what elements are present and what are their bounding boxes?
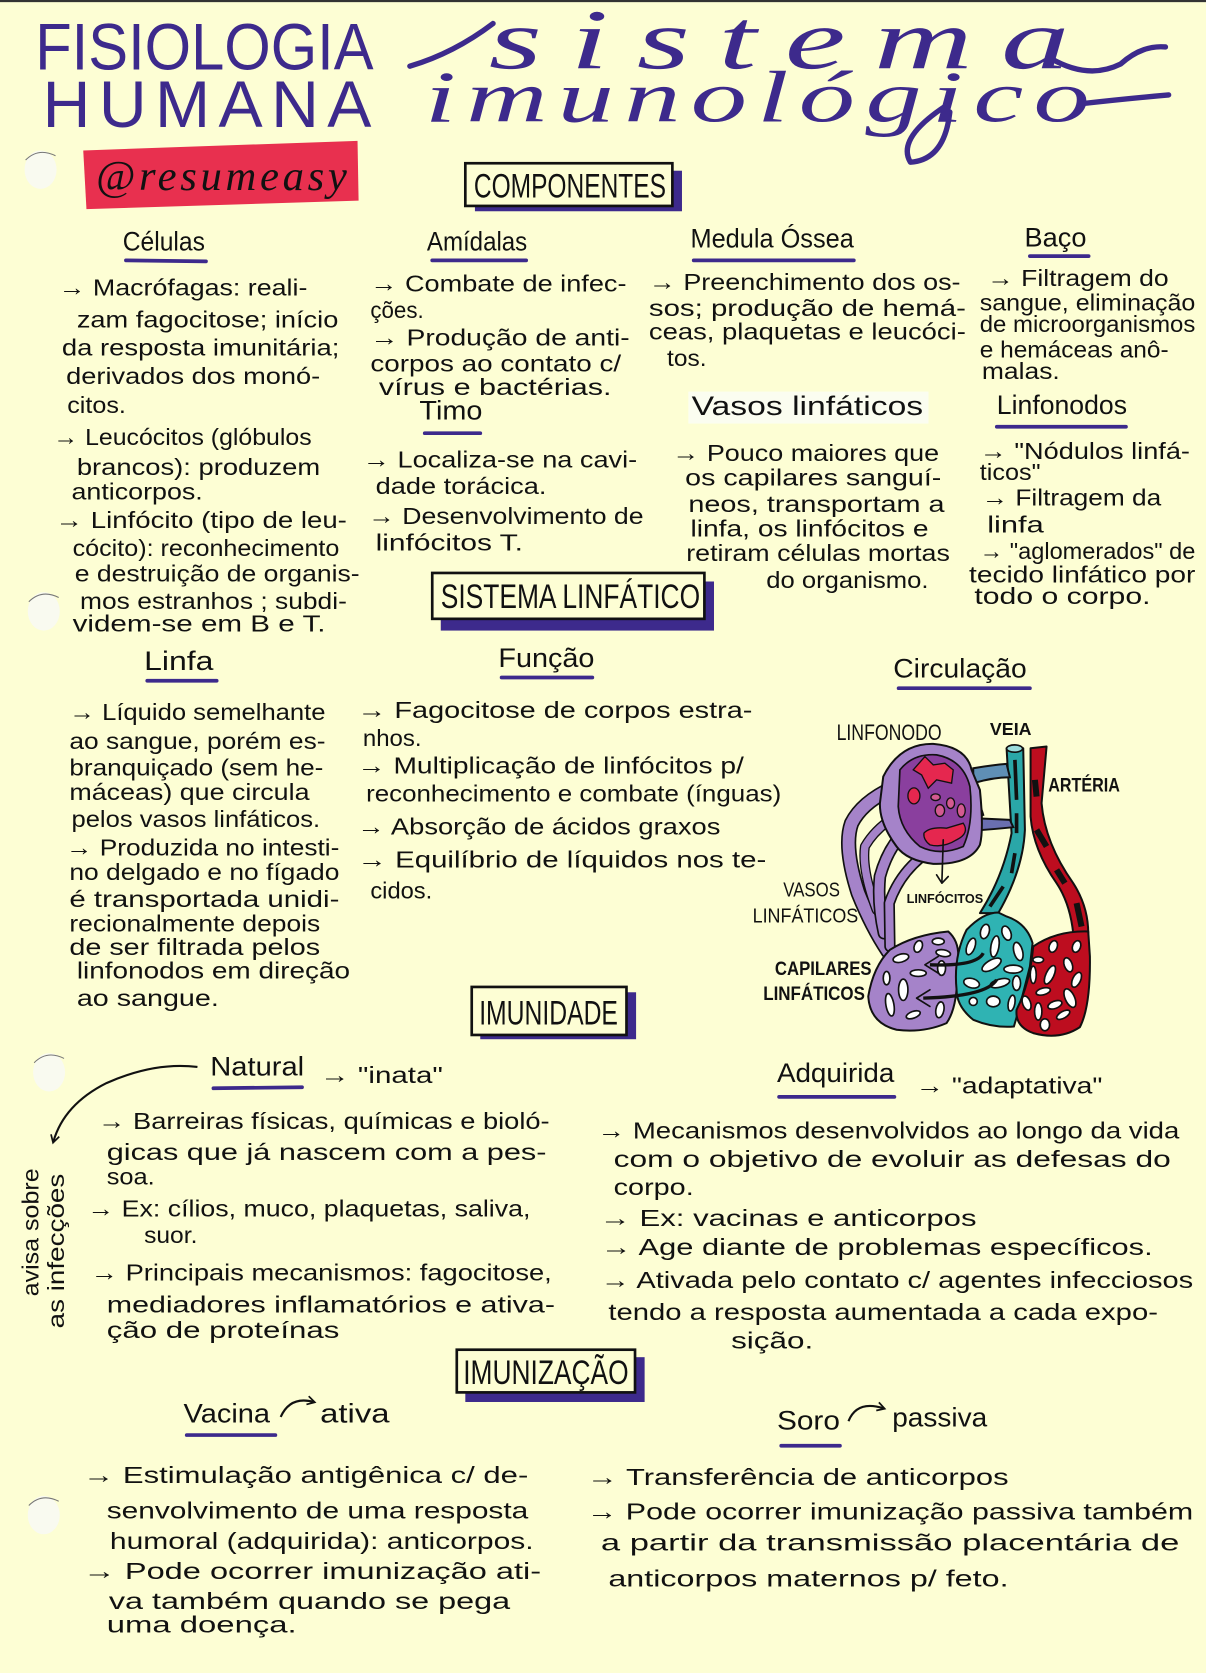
heading: Componentes xyxy=(465,163,682,211)
text: Linfa body: → Produzida no intesti- xyxy=(66,835,339,861)
text: Linfa body: ao sangue, porém es- xyxy=(69,728,326,754)
text: Vasos linfáticos body xyxy=(672,440,950,593)
title: sistema imunológico: imunológico xyxy=(425,58,1090,138)
title: sistema imunológico xyxy=(410,0,1169,162)
text: Natural body: → Principais mecanismos: fagocitose, xyxy=(91,1259,552,1285)
side note: avisa sobre as infecções xyxy=(17,1168,69,1328)
text: Vasos linfáticos body: linfa, os linfócitos e xyxy=(691,516,929,542)
text: Adquirida body: → Age diante de problemas específicos. xyxy=(601,1234,1153,1260)
heading: Imunidade xyxy=(472,987,636,1039)
text: Medula Óssea body xyxy=(649,269,966,371)
title: Fisiologia Humana: FISIOLOGIA xyxy=(35,10,374,84)
text: Adquirida body: sição. xyxy=(731,1328,813,1354)
heading: Soro: Soro xyxy=(777,1406,840,1436)
heading: Vasos linfáticos: Vasos linfáticos xyxy=(692,391,923,421)
heading: Soro xyxy=(777,1403,987,1446)
text: Linfa body: → Líquido semelhante xyxy=(69,699,326,725)
text: Linfonodos body: tecido linfático por xyxy=(969,562,1196,588)
heading: Amídalas: Amídalas xyxy=(427,227,527,257)
text: Células body: → Macrófagas: reali- xyxy=(59,275,307,301)
heading: Linfonodos: Linfonodos xyxy=(997,390,1127,420)
text: Baço body: malas. xyxy=(982,358,1060,384)
text: Natural body: gicas que já nascem com a pes- xyxy=(107,1139,546,1165)
text: Baço body: de microorganismos xyxy=(980,311,1195,337)
label: @resumeasy: @resumeasy xyxy=(96,153,347,200)
text: Função body: → Fagocitose de corpos estra- xyxy=(358,697,752,723)
heading: Função: Função xyxy=(498,643,594,673)
artery xyxy=(1031,747,1088,933)
text: Vacina body: va também quando se pega xyxy=(109,1588,511,1614)
text: Baço body xyxy=(980,265,1195,384)
text: Células body: cócito): reconhecimento xyxy=(73,535,339,561)
heading: Imunização xyxy=(457,1350,645,1402)
panel: Linfonodos xyxy=(969,390,1196,609)
heading: Componentes: COMPONENTES xyxy=(474,167,666,205)
panel: Circulação xyxy=(753,654,1120,1036)
text: Função body: cidos. xyxy=(370,877,432,903)
text: Adquirida body: → Ex: vacinas e anticorpos xyxy=(600,1205,977,1231)
heading: Vacina: ativa xyxy=(320,1398,390,1428)
text: Função body xyxy=(358,697,781,903)
text: Medula Óssea body: → Preenchimento dos os- xyxy=(649,269,961,295)
text: Baço body: → Filtragem do xyxy=(987,265,1169,291)
capillary beds xyxy=(868,912,1090,1036)
text: Linfa body: no delgado e no fígado xyxy=(69,859,339,885)
text: Amídalas body: → Combate de infec- xyxy=(370,270,626,296)
heading: Vacina xyxy=(184,1398,390,1435)
heading: Sistema Linfático xyxy=(432,573,714,631)
panel: Linfa xyxy=(66,646,350,1011)
text: Vacina body: humoral (adquirida): anticorpos. xyxy=(110,1528,534,1554)
text: Soro body: → Pode ocorrer imunização passiva também xyxy=(587,1498,1193,1524)
panel: Células xyxy=(53,227,360,637)
panel: Baço xyxy=(980,222,1195,384)
text: Natural body: → Ex: cílios, muco, plaquetas, saliva, xyxy=(88,1195,530,1221)
heading: Imunidade: IMUNIDADE xyxy=(479,994,618,1032)
panel: Timo xyxy=(363,395,644,556)
text: Função body: → Absorção de ácidos graxos xyxy=(358,813,720,839)
text: Natural body xyxy=(88,1108,555,1343)
text: Adquirida body: com o objetivo de evoluir as defesas do xyxy=(614,1146,1171,1172)
labels: ARTÉRIA xyxy=(1048,774,1120,797)
heading: Medula Óssea: Medula Óssea xyxy=(691,224,854,254)
text: Vacina body xyxy=(83,1462,541,1637)
text: Linfonodos body: → Filtragem da xyxy=(982,485,1162,511)
text: Natural body: suor. xyxy=(144,1222,197,1248)
text: Células body: → Leucócitos (glóbulos xyxy=(53,424,312,450)
text: Linfonodos body: todo o corpo. xyxy=(974,583,1151,609)
text: Timo body xyxy=(363,446,644,556)
text: Amídalas body: → Produção de anti- xyxy=(370,325,630,351)
text: Natural body: → Barreiras físicas, químicas e bioló- xyxy=(98,1108,550,1134)
title: Fisiologia Humana xyxy=(35,10,374,142)
text: Vacina body: uma doença. xyxy=(107,1611,297,1637)
text: Linfa body: recionalmente depois xyxy=(69,910,320,936)
text: Vacina body: → Pode ocorrer imunização ati- xyxy=(83,1558,541,1584)
text: Função body: reconhecimento e combate (ínguas) xyxy=(366,780,781,806)
text: Linfa body: pelos vasos linfáticos. xyxy=(72,806,320,832)
text: Vasos linfáticos body: retiram células mortas xyxy=(686,540,950,566)
labels xyxy=(753,719,1120,1005)
text: Amídalas body: ções. xyxy=(370,297,424,323)
text: Soro body: anticorpos maternos p/ feto. xyxy=(608,1566,1009,1592)
text: Timo body: → Localiza-se na cavi- xyxy=(363,446,637,472)
text: Células body xyxy=(53,275,360,637)
text: Baço body: e hemáceas anô- xyxy=(980,336,1169,362)
panel: Medula Óssea xyxy=(649,224,966,371)
text: Função body: nhos. xyxy=(363,725,422,751)
text: Células body: derivados dos monó- xyxy=(66,363,320,389)
labels: VASOS xyxy=(783,878,840,901)
lymph vessels xyxy=(849,785,920,951)
text: Soro body xyxy=(587,1464,1193,1592)
text: Soro body: → Transferência de anticorpos xyxy=(587,1464,1009,1490)
text: Linfa body: linfonodos em direção xyxy=(77,957,350,983)
text: Células body: zam fagocitose; início xyxy=(77,307,338,333)
text: Linfa body: ao sangue. xyxy=(77,985,219,1011)
text: Células body: videm-se em B e T. xyxy=(73,611,326,637)
panel: Amídalas xyxy=(370,227,630,400)
text: Medula Óssea body: sos; produção de hemá- xyxy=(649,295,966,321)
text: Linfa body xyxy=(66,699,350,1011)
text: Amídalas body xyxy=(370,270,630,400)
text: Vasos linfáticos body: do organismo. xyxy=(766,567,929,593)
text: Vasos linfáticos body: os capilares sanguí- xyxy=(685,464,941,490)
labels: CAPILARES xyxy=(775,959,872,980)
lymph node xyxy=(880,744,1013,864)
panel: Natural xyxy=(17,1052,555,1343)
text: Adquirida body: → Mecanismos desenvolvidos ao longo da vida xyxy=(598,1117,1180,1143)
text: Linfonodos body xyxy=(969,438,1196,609)
labels: LINFÁTICOS xyxy=(753,904,858,927)
diagram: lymph circulation xyxy=(753,719,1120,1036)
text: Linfa body: é transportada unidi- xyxy=(69,886,339,912)
panel: Adquirida xyxy=(598,1058,1193,1354)
text: Função body: → Equilíbrio de líquidos nos te- xyxy=(358,846,766,872)
heading: Imunização: IMUNIZAÇÃO xyxy=(463,1354,629,1392)
arrow: natural to side note xyxy=(53,1066,197,1142)
text: Natural body: mediadores inflamatórios e ativa- xyxy=(107,1291,555,1317)
side note: avisa sobre as infecções: as infecções xyxy=(43,1174,69,1328)
text: Amídalas body: vírus e bactérias. xyxy=(379,374,612,400)
labels: LINFÁTICOS xyxy=(763,982,865,1005)
text: Soro body: a partir da transmissão placentária de xyxy=(601,1529,1179,1555)
text: Vacina body: senvolvimento de uma resposta xyxy=(107,1497,529,1523)
heading: Natural xyxy=(210,1052,443,1088)
heading: Células: Células xyxy=(123,227,205,257)
text: Células body: citos. xyxy=(67,392,126,418)
text: Linfonodos body: → "Nódulos linfá- xyxy=(980,438,1190,464)
heading: Soro: passiva xyxy=(892,1403,987,1433)
text: Células body: mos estranhos ; subdi- xyxy=(80,588,347,614)
label: @resumeasy xyxy=(83,141,359,209)
text: Células body: e destruição de organis- xyxy=(75,560,360,586)
text: Amídalas body: corpos ao contato c/ xyxy=(370,350,622,376)
labels: LINFONODO xyxy=(837,720,942,745)
text: Linfonodos body: linfa xyxy=(987,511,1045,537)
text: Timo body: → Desenvolvimento de xyxy=(368,503,644,529)
text: Natural body: ção de proteínas xyxy=(107,1317,339,1343)
text: Baço body: sangue, eliminação xyxy=(980,289,1195,315)
text: Adquirida body: → Ativada pelo contato c/ agentes infecciosos xyxy=(601,1267,1193,1293)
text: Linfonodos body: ticos" xyxy=(980,459,1041,485)
text: Timo body: dade torácica. xyxy=(376,473,546,499)
panel: Soro xyxy=(587,1403,1193,1592)
arrows xyxy=(917,840,997,1006)
text: Natural body: soa. xyxy=(107,1163,155,1189)
heading: Adquirida: Adquirida xyxy=(777,1058,895,1088)
panel: Vasos linfáticos xyxy=(672,391,950,593)
text: Células body: da resposta imunitária; xyxy=(62,334,339,360)
heading: Sistema Linfático: SISTEMA LINFÁTICO xyxy=(441,578,700,616)
side note: avisa sobre as infecções: avisa sobre xyxy=(17,1168,43,1296)
text: Timo body: linfócitos T. xyxy=(376,530,523,556)
heading: Circulação: Circulação xyxy=(893,654,1027,684)
heading: Natural: → "inata" xyxy=(320,1062,443,1088)
text: Células body: anticorpos. xyxy=(72,478,203,504)
panel: Vacina xyxy=(83,1398,541,1637)
text: Medula Óssea body: tos. xyxy=(667,345,707,371)
vein xyxy=(980,745,1025,913)
text: Adquirida body xyxy=(598,1117,1193,1354)
text: Vasos linfáticos body: neos, transportam a xyxy=(688,491,946,517)
text: Linfonodos body: → "aglomerados" de xyxy=(980,538,1195,564)
text: Vasos linfáticos body: → Pouco maiores que xyxy=(672,440,939,466)
text: Medula Óssea body: ceas, plaquetas e leucóci- xyxy=(649,318,966,344)
text: Células body: brancos): produzem xyxy=(77,454,320,480)
heading: Natural: Natural xyxy=(210,1052,304,1081)
heading: Adquirida xyxy=(777,1058,1102,1099)
heading: Linfa xyxy=(144,646,217,681)
heading: Vacina: Vacina xyxy=(184,1398,270,1428)
text: Linfa body: de ser filtrada pelos xyxy=(69,934,320,960)
heading: Adquirida: → "adaptativa" xyxy=(916,1073,1102,1099)
text: Linfa body: máceas) que circula xyxy=(69,779,311,805)
heading: Timo: Timo xyxy=(419,395,482,425)
labels: LINFÓCITOS xyxy=(907,891,983,906)
text: Função body: → Multiplicação de linfócitos p/ xyxy=(358,753,744,779)
text: Adquirida body: tendo a resposta aumentada a cada expo- xyxy=(608,1299,1158,1325)
labels: VEIA xyxy=(990,719,1032,739)
title: Fisiologia Humana: HUMANA xyxy=(43,68,371,142)
text: Linfa body: branquiçado (sem he- xyxy=(69,755,323,781)
heading: Baço: Baço xyxy=(1025,222,1086,252)
text: Células body: → Linfócito (tipo de leu- xyxy=(55,507,347,533)
panel: Função xyxy=(358,643,781,903)
text: Vacina body: → Estimulação antigênica c/ de- xyxy=(83,1462,528,1488)
heading: Linfa: Linfa xyxy=(144,646,214,676)
text: Adquirida body: corpo. xyxy=(614,1174,694,1200)
